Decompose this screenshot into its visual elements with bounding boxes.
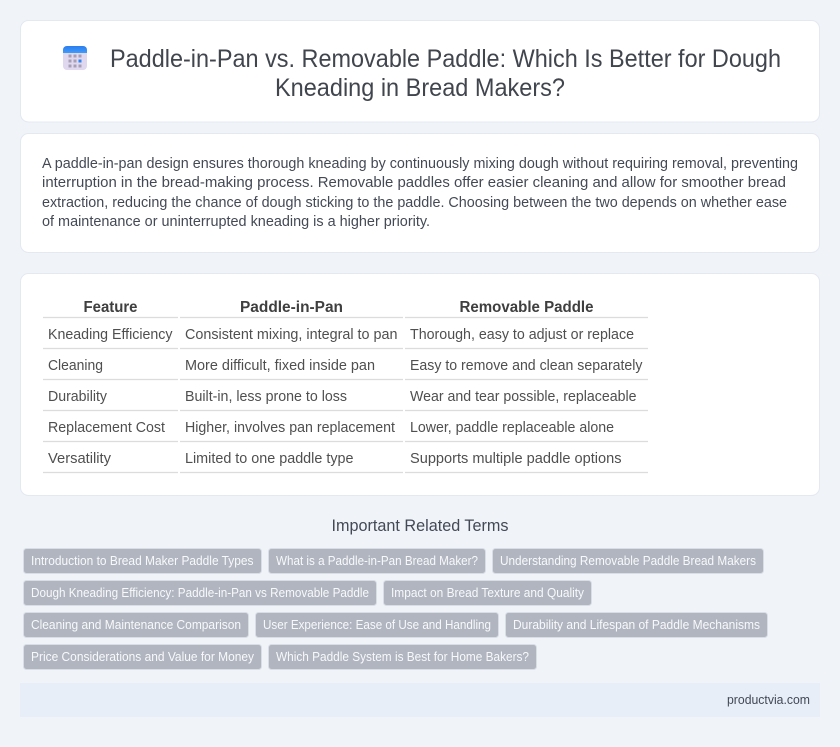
tag <box>268 644 536 670</box>
table header <box>84 299 594 316</box>
tag <box>506 612 768 638</box>
tag: Dough Kneading Efficiency: Paddle-in-Pan vs Removable Paddle <box>31 586 369 600</box>
tag: Durability and Lifespan of Paddle Mechanisms <box>513 618 760 632</box>
tag: What is a Paddle-in-Pan Bread Maker? <box>276 554 478 568</box>
row: cleaning <box>48 358 643 374</box>
heading: important related terms: Important Related Terms <box>332 517 508 535</box>
tag <box>24 580 376 606</box>
table header: Feature <box>84 299 138 316</box>
row: versatility: Versatility <box>48 451 112 467</box>
row: kneading efficiency <box>48 327 634 343</box>
panel: comparison table <box>20 274 820 496</box>
row: versatility <box>48 451 622 467</box>
table header: Removable Paddle <box>460 299 594 316</box>
tag <box>24 548 262 574</box>
tag <box>24 612 248 638</box>
text block: introduction paragraph: extraction, reducing the chance of dough sticking to the paddle. Choosing between the two depends on whether ease <box>42 194 787 211</box>
row: cleaning: Cleaning <box>48 358 103 374</box>
text block: introduction paragraph: interruption in the bread-making process. Removable paddles offer easier cleaning and allow for smoother bread <box>42 174 786 191</box>
row: replacement cost: Lower, paddle replaceable alone <box>410 420 614 436</box>
row: replacement cost: Replacement Cost <box>48 420 165 436</box>
tag <box>256 612 498 638</box>
row: replacement cost <box>48 420 614 436</box>
table header: Paddle-in-Pan <box>240 299 343 316</box>
tag <box>384 580 592 606</box>
row: versatility: Limited to one paddle type <box>185 451 354 467</box>
tag: User Experience: Ease of Use and Handling <box>263 618 491 632</box>
icon: calendar <box>63 46 87 70</box>
row: kneading efficiency: Kneading Efficiency <box>48 327 173 343</box>
tag: Cleaning and Maintenance Comparison <box>31 618 241 632</box>
footer <box>20 683 820 717</box>
tag <box>492 548 764 574</box>
tag: Which Paddle System is Best for Home Bakers? <box>276 650 529 664</box>
title <box>110 45 781 102</box>
tag: Understanding Removable Paddle Bread Makers <box>500 554 756 568</box>
row: durability: Durability <box>48 389 108 405</box>
row: durability: Wear and tear possible, replaceable <box>410 389 636 405</box>
row: cleaning: More difficult, fixed inside pan <box>185 358 375 374</box>
tag <box>24 644 262 670</box>
tag: Introduction to Bread Maker Paddle Types <box>31 554 254 568</box>
row: kneading efficiency: Consistent mixing, integral to pan <box>185 327 398 343</box>
tag: Price Considerations and Value for Money <box>31 650 255 664</box>
row: cleaning: Easy to remove and clean separately <box>410 358 643 374</box>
row: versatility: Supports multiple paddle options <box>410 451 622 467</box>
panel: introduction <box>20 134 820 252</box>
title: Paddle-in-Pan vs. Removable Paddle: Which Is Better for Dough <box>110 45 781 73</box>
row: durability <box>48 389 636 405</box>
text block: introduction paragraph <box>42 155 798 230</box>
tag <box>268 548 486 574</box>
footer: productvia.com <box>727 692 810 707</box>
row: durability: Built-in, less prone to loss <box>185 389 347 405</box>
row: kneading efficiency: Thorough, easy to adjust or replace <box>410 327 634 343</box>
related terms tags <box>24 548 768 670</box>
text block: introduction paragraph: of maintenance or uninterrupted kneading is a higher priority. <box>42 213 430 230</box>
text block: introduction paragraph: A paddle-in-pan design ensures thorough kneading by continuously mixing dough without requiring removal, preventing <box>42 155 798 172</box>
row: replacement cost: Higher, involves pan replacement <box>185 420 395 436</box>
title: Kneading in Bread Makers? <box>275 74 565 102</box>
tag: Impact on Bread Texture and Quality <box>391 586 585 600</box>
panel: title card <box>20 20 820 122</box>
